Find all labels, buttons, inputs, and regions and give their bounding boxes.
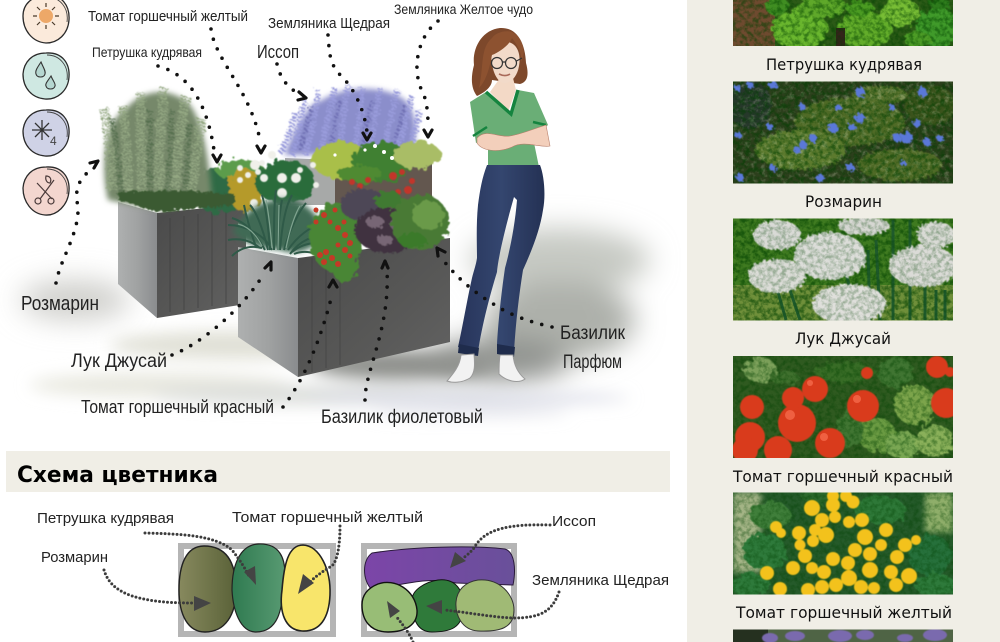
heading: flowerbed scheme: [6, 451, 670, 492]
plant: hyssop: [280, 85, 420, 155]
plant: garlic chive leaves: [228, 190, 325, 258]
illustration: front planter: [238, 238, 450, 377]
label: garlic chives: Лук Джусай: [71, 351, 167, 372]
illustration: back planter: [285, 158, 432, 210]
label: scheme rosemary: Розмарин: [41, 549, 108, 566]
bed: rosemary: [179, 546, 236, 632]
icon: watering requirement: [23, 53, 69, 99]
dotted arrows: scheme callouts: [104, 525, 559, 642]
neck and chest: [490, 78, 516, 112]
illustration: rear left planter: [118, 202, 246, 318]
caption: garlic chives: Лук Джусай: [795, 329, 891, 348]
label: scheme yellow tomato: Томат горшечный желтый: [232, 509, 423, 526]
green top: [470, 90, 548, 167]
right sneaker: [499, 355, 525, 381]
label: scheme hyssop: Иссоп: [552, 513, 596, 530]
icon: pruning scissors: [23, 167, 69, 215]
photo: red tomato: [732, 356, 961, 464]
photo: yellow tomato: [730, 488, 955, 597]
diagram: left planter scheme: [179, 544, 333, 634]
plant: purple basil: [340, 189, 419, 253]
bed: curly parsley: [232, 544, 285, 632]
label: hyssop: Иссоп: [257, 42, 299, 62]
photo: curly parsley: [733, 0, 953, 46]
plant: rosemary: [104, 88, 235, 212]
heading: flowerbed scheme: Схема цветника: [17, 463, 218, 488]
panel: plant photo column: [687, 0, 1000, 642]
bed: yellow tomato: [281, 545, 330, 631]
dotted arrows: planting callouts: [56, 21, 552, 407]
plant: strawberries: [312, 141, 441, 208]
label: perfume basil: Базилик: [560, 323, 626, 344]
illustration: ground shadows: [20, 228, 650, 416]
jeans cuffs: [458, 344, 515, 357]
label: purple basil: Базилик фиолетовый: [321, 407, 483, 428]
left sneaker: [447, 354, 475, 382]
plant: red potted tomato: [309, 204, 363, 282]
bed: strawberry left: [362, 582, 417, 632]
caption: rosemary: Розмарин: [805, 192, 882, 211]
icon: frost hardiness zone 4: [23, 110, 69, 156]
hair back: [472, 28, 528, 96]
label: yellow potted tomato: Томат горшечный желтый: [88, 8, 248, 25]
label: curly parsley: Петрушка кудрявая: [92, 44, 202, 60]
caption: parsley: Петрушка кудрявая: [766, 55, 922, 74]
photo: hyssop: [733, 629, 953, 642]
jeans: [458, 165, 544, 352]
glasses: [492, 58, 522, 68]
diagram: right planter scheme: [362, 546, 514, 634]
plant: white chive flowers: [237, 151, 319, 207]
bed: hyssop: [364, 547, 514, 590]
plant: parsley and yellow tomato in rear planter: [192, 159, 315, 213]
hair front: [479, 31, 524, 88]
label: perfume basil second line: Парфюм: [563, 352, 622, 373]
label: yellow wonder strawberry: Земляника Желтое чудо: [394, 1, 533, 17]
label: generous strawberry: Земляника Щедрая: [268, 15, 390, 32]
face: [491, 42, 520, 83]
photo: garlic chives: [733, 217, 957, 324]
illustration: woman standing with crossed arms: [447, 28, 550, 382]
label: scheme strawberry: Земляника Щедрая: [532, 572, 669, 589]
label: red potted tomato: Томат горшечный красный: [81, 397, 274, 417]
photo: rosemary: [728, 81, 956, 184]
plant: perfume basil: [374, 191, 449, 250]
bed: strawberry center: [412, 580, 463, 632]
crossed arms: [477, 125, 550, 150]
caption: yellow tomato: Томат горшечный желтый: [735, 603, 952, 622]
icon: frost hardiness zone 4: 4: [50, 134, 57, 148]
label: scheme parsley: Петрушка кудрявая: [37, 510, 174, 527]
bed: strawberry right: [456, 580, 514, 631]
label: rosemary: Розмарин: [21, 293, 99, 315]
icon: sunlight requirement: [23, 0, 69, 43]
caption: red tomato: Томат горшечный красный: [732, 467, 953, 486]
